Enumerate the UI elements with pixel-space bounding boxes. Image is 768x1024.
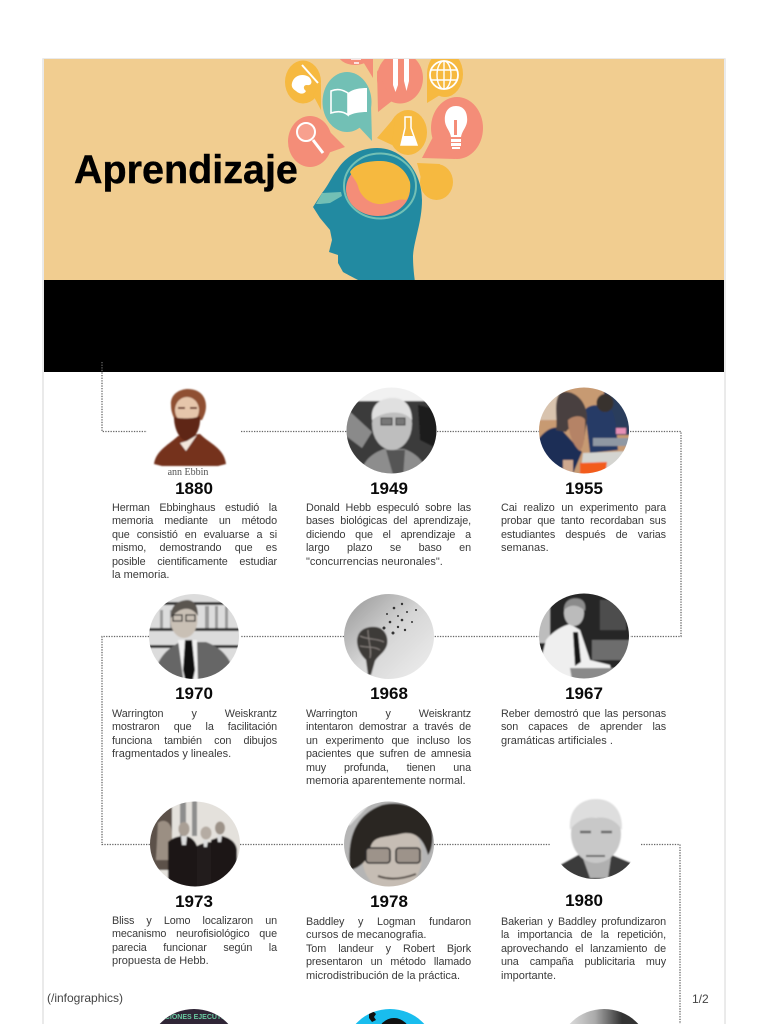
text 1980: la importancia de la repetición, bbox=[501, 929, 666, 941]
text 1978: cursos de mecanografia. bbox=[306, 929, 426, 941]
portrait: bottom left, executive functions bbox=[160, 1009, 228, 1024]
portrait: Bakerian 1980 bbox=[560, 798, 631, 879]
text 1968: pacientes que sufren de amnesia bbox=[306, 748, 471, 760]
text 1973: mecanismo neurofisiológico que bbox=[112, 928, 277, 940]
text 1880: posible cientificamente estudiar bbox=[112, 556, 277, 568]
text 1968: Warrington y Weiskrantz bbox=[306, 708, 471, 720]
portrait: bottom right, textured bbox=[570, 1009, 638, 1024]
header illustration: head with idea bubbles bbox=[285, 39, 483, 282]
text 1980: aprovechando el lanzamiento de bbox=[501, 943, 666, 955]
text 1967: son capaces de aprender las bbox=[501, 721, 666, 733]
text 1880 bbox=[112, 502, 278, 581]
text 1973 bbox=[112, 915, 278, 967]
text 1978 bbox=[306, 916, 472, 982]
footer link text: (/infographics) bbox=[47, 991, 123, 1005]
year 1970: 1970 bbox=[175, 684, 213, 703]
icon: globe bubble bbox=[427, 59, 463, 103]
icon: empty thought bubble bbox=[417, 163, 453, 200]
text 1980 bbox=[501, 916, 666, 982]
text 1968: memoria aparentemente normal. bbox=[306, 775, 466, 787]
text 1949: bases biológicas del aprendizaje, bbox=[306, 515, 471, 527]
text 1978: Baddley y Logman fundaron bbox=[306, 916, 471, 928]
text 1970: Warrington y Weiskrantz bbox=[112, 708, 277, 720]
portrait: Hebb 1949 bbox=[346, 388, 436, 474]
text 1973: parecia funcionar según la bbox=[112, 942, 277, 954]
portrait: Warrington 1970 bbox=[149, 594, 239, 679]
text 1970 bbox=[112, 708, 277, 760]
text 1949: largo plazo se baso en bbox=[306, 542, 471, 554]
icon: palette bubble bbox=[285, 60, 321, 110]
title: Aprendizaje bbox=[74, 148, 298, 192]
year 1880: 1880 bbox=[175, 479, 213, 498]
text 1970: funciona también con dibujos bbox=[112, 735, 277, 747]
portrait: group 1973 bbox=[150, 802, 240, 886]
header banner bbox=[44, 59, 724, 280]
text 1955: Cai realizo un experimento para bbox=[501, 502, 666, 514]
text 1955: estudiantes después de varias bbox=[501, 529, 666, 541]
text 1980: Bakerian y Baddley profundizaron bbox=[501, 916, 666, 928]
text 1880: Herman Ebbinghaus estudió la bbox=[112, 502, 277, 514]
text 1978: presentaron un método llamado bbox=[306, 956, 471, 968]
text 1968: un experimento que incluso los bbox=[306, 735, 471, 747]
head silhouette bbox=[313, 148, 422, 282]
portrait: Baddeley 1978 bbox=[344, 802, 434, 886]
text 1949: "concurrencias neuronales". bbox=[306, 556, 443, 568]
text 1967: gramáticas artificiales . bbox=[501, 735, 613, 747]
text 1880: que consistió en evaluarse a si bbox=[112, 529, 277, 541]
brain bbox=[344, 154, 416, 218]
text 1949 bbox=[306, 502, 472, 568]
portrait: Ebbinghaus 1880 bbox=[154, 389, 226, 478]
text 1978: microdistribución de la práctica. bbox=[306, 970, 460, 982]
text 1967: Reber demostró que las personas bbox=[501, 708, 666, 720]
footer page number: 1/2 bbox=[692, 992, 709, 1006]
portrait: classroom 1955 bbox=[539, 388, 629, 474]
text 1973: propuesta de Hebb. bbox=[112, 955, 209, 967]
text 1880: la memoria. bbox=[112, 569, 169, 581]
year 1967: 1967 bbox=[565, 684, 603, 703]
text 1967 bbox=[501, 708, 666, 747]
portrait: bottom left, executive functions: CIONES EJECUTI bbox=[165, 1014, 223, 1021]
text 1980: importante. bbox=[501, 970, 556, 982]
year 1978: 1978 bbox=[370, 892, 408, 911]
year 1949: 1949 bbox=[370, 479, 408, 498]
text 1980: una campaña publicitaria muy bbox=[501, 956, 666, 968]
text 1880: memoria mediante un método bbox=[112, 515, 277, 527]
year 1973: 1973 bbox=[175, 892, 213, 911]
year 1968: 1968 bbox=[370, 684, 408, 703]
icon: small top bubble bbox=[340, 59, 373, 78]
text 1968: intentaron demostrar a través de bbox=[306, 721, 471, 733]
text 1880: mismo, demostrando que es bbox=[112, 542, 277, 554]
timeline connector bbox=[102, 362, 681, 1024]
text 1968 bbox=[306, 708, 472, 787]
text 1970: fragmentados y lineales. bbox=[112, 748, 231, 760]
black band bbox=[44, 280, 724, 372]
text 1955: probar que tanto recordaban sus bbox=[501, 515, 666, 527]
icon: pencils bubble bbox=[377, 59, 423, 112]
icon: book bubble bbox=[322, 72, 372, 141]
text 1973: Bliss y Lomo localizaron un bbox=[112, 915, 277, 927]
text 1955 bbox=[501, 502, 666, 554]
portrait: Ebbinghaus 1880: ann Ebbin bbox=[168, 467, 208, 478]
text 1968: muy profunda, tienen una bbox=[306, 762, 471, 774]
text 1955: semanas. bbox=[501, 542, 549, 554]
icon: flask bubble bbox=[377, 110, 427, 155]
portrait: bottom center, cyan bbox=[356, 1009, 424, 1024]
hair highlight bbox=[316, 192, 342, 204]
year 1955: 1955 bbox=[565, 479, 603, 498]
portrait: brain 1968 bbox=[344, 594, 434, 679]
text 1970: mostraron que la facilitación bbox=[112, 721, 277, 733]
portrait: Reber 1967 bbox=[539, 594, 629, 678]
icon: lightbulb bubble bbox=[422, 97, 483, 159]
text 1949: diciendo que el aprendizaje a bbox=[306, 529, 471, 541]
icon: magnifier bubble bbox=[288, 116, 345, 167]
text 1949: Donald Hebb especuló sobre las bbox=[306, 502, 471, 514]
text 1978: Tom landeur y Robert Bjork bbox=[306, 943, 471, 955]
year 1980: 1980 bbox=[565, 891, 603, 910]
